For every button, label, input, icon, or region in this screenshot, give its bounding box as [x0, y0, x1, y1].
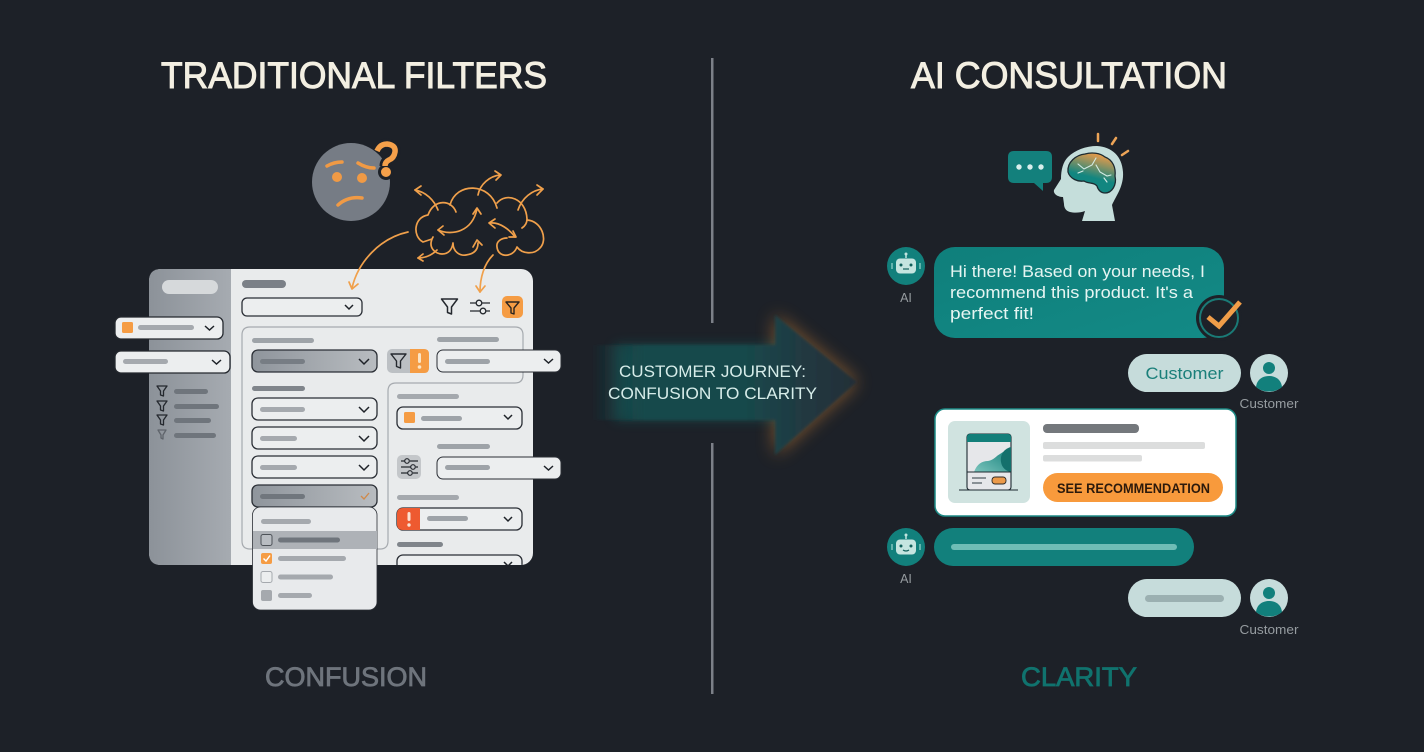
floating dropdown with orange swatch	[115, 317, 223, 339]
title: AI consultation: AI CONSULTATION	[911, 55, 1227, 96]
chat message: customer placeholder	[1128, 579, 1298, 637]
floating dropdown right lower	[437, 457, 561, 479]
arrow label: CUSTOMER JOURNEY:	[619, 362, 806, 381]
center divider	[711, 58, 714, 694]
bubble: customer	[1128, 354, 1241, 392]
floating dropdown	[115, 351, 230, 373]
card: product recommendation	[935, 409, 1236, 516]
avatar: AI robot	[887, 247, 925, 285]
panel: filter interface	[149, 269, 533, 577]
label: AI: AI	[900, 291, 912, 305]
label: customer: Customer	[1240, 397, 1298, 411]
infographic: traditional filters versus AI consultation	[116, 58, 1298, 694]
bubble: customer placeholder	[1128, 579, 1241, 617]
text placeholder lines	[1043, 424, 1205, 462]
avatar: customer	[1250, 579, 1288, 617]
toolbar icon: sliders	[470, 300, 490, 314]
toolbar icon: funnel	[442, 299, 458, 314]
bubble: AI message: perfect fit!	[950, 305, 1034, 323]
sidebar filter list	[157, 386, 219, 439]
bubble: AI message	[934, 247, 1224, 338]
button: see recommendation: SEE RECOMMENDATION	[1057, 481, 1210, 496]
icon: tangled thought cloud with arrows	[349, 171, 544, 292]
right filter column	[387, 337, 522, 577]
arrow label	[608, 362, 817, 403]
bubble: customer: Customer	[1146, 364, 1224, 383]
product image	[948, 421, 1030, 503]
chat message: AI greeting	[887, 247, 1242, 341]
open dropdown menu with checkboxes	[252, 507, 377, 610]
avatar: customer	[1250, 354, 1288, 392]
arrow label: CONFUSION TO CLARITY	[608, 384, 817, 403]
icon: orange check badge	[1196, 295, 1242, 341]
button: see recommendation	[1043, 473, 1223, 502]
chat message: customer	[1128, 354, 1298, 411]
bubble: AI message: recommend this product. It's a	[950, 284, 1194, 302]
sidebar search pill	[162, 280, 218, 294]
bubble: AI placeholder	[934, 528, 1194, 566]
heading bar	[242, 280, 286, 288]
avatar: AI robot	[887, 528, 925, 566]
toolbar icon: active orange funnel	[502, 296, 523, 318]
label: AI: AI	[900, 572, 912, 586]
icon: confused face	[312, 143, 395, 221]
left filter column	[252, 338, 377, 507]
chat message: AI placeholder	[887, 528, 1194, 586]
icon: AI head with brain and speech bubble	[1008, 134, 1128, 221]
sidebar	[149, 269, 231, 565]
title: traditional filters: TRADITIONAL FILTERS	[161, 55, 547, 96]
label: customer: Customer	[1240, 623, 1298, 637]
bubble: AI message: Hi there! Based on your needs, I	[950, 263, 1205, 281]
inner panel outline	[242, 327, 523, 549]
arrow: customer journey	[592, 315, 857, 455]
top dropdown	[242, 298, 362, 316]
floating dropdown right upper	[437, 350, 561, 372]
caption: clarity: CLARITY	[1021, 662, 1137, 692]
caption: confusion: CONFUSION	[265, 662, 427, 692]
